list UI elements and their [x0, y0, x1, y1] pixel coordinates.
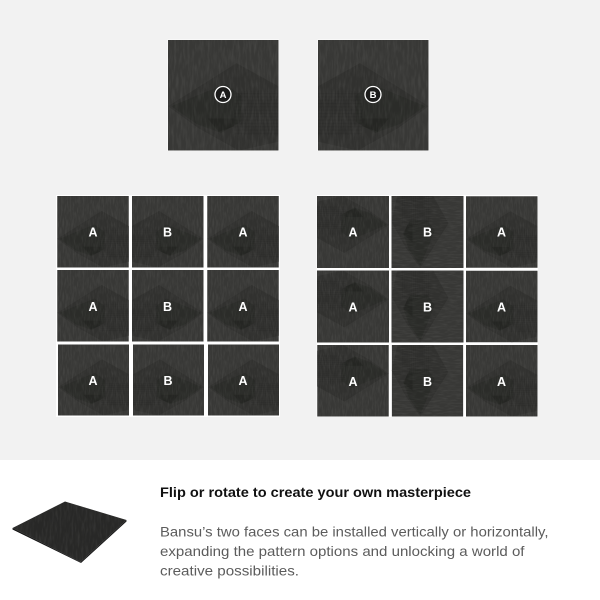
- text block: description: Bansu’s two faces can be installed vertically or horizontally,: [160, 524, 548, 540]
- tile A row 3 column 3: A: [238, 374, 248, 388]
- tile A row 2 column 3: A: [238, 300, 248, 314]
- tile A row 1 column 1: A: [88, 226, 98, 240]
- tile B row 3 column 2: [133, 344, 204, 416]
- tile B rotated row 2 column 2: B: [423, 300, 432, 314]
- heading: Flip or rotate to create your own masterpiece: [160, 485, 471, 500]
- tile face B: [318, 40, 429, 151]
- tile A rotated row 3 column 1: [317, 345, 389, 416]
- tile A row 2 column 3: [466, 271, 538, 342]
- tile B rotated row 1 column 2: [392, 196, 464, 268]
- tile A rotated row 2 column 1: A: [348, 300, 358, 314]
- tile A rotated row 1 column 1: A: [348, 226, 358, 240]
- tile B rotated row 3 column 2: [392, 345, 463, 416]
- tile A row 1 column 1: [57, 196, 129, 268]
- panel: single tiles A and B: [168, 40, 429, 151]
- text block: description: creative possibilities.: [160, 562, 299, 578]
- tile A row 2 column 3: A: [497, 300, 506, 314]
- tile A row 3 column 1: A: [88, 374, 98, 388]
- tile B rotated row 1 column 2: B: [423, 226, 432, 240]
- panel: left 3x3 layout, mirrored faces: [56, 195, 280, 417]
- tile A rotated row 1 column 1: [317, 196, 389, 268]
- icon: tile in perspective: [12, 500, 127, 564]
- background: upper grey panel: [0, 0, 600, 460]
- tile A rotated row 2 column 1: [317, 270, 389, 342]
- panel: right 3x3 layout, rotated faces: [316, 195, 538, 417]
- tile A row 2 column 3: [207, 270, 279, 342]
- tile face A: A: [220, 90, 227, 101]
- text block: description: expanding the pattern options and unlocking a world of: [160, 543, 525, 559]
- tile B rotated row 2 column 2: [392, 270, 464, 342]
- tile A row 3 column 3: A: [497, 375, 506, 389]
- tile A row 1 column 3: A: [497, 226, 506, 240]
- tile face B: B: [370, 90, 377, 101]
- tile A row 1 column 3: [466, 196, 538, 268]
- tile B row 1 column 2: B: [163, 226, 172, 240]
- tile A row 2 column 1: A: [88, 300, 98, 314]
- tile B row 2 column 2: B: [163, 300, 172, 314]
- tile face A: [168, 40, 279, 151]
- tile B row 3 column 2: B: [163, 374, 173, 388]
- tile A row 1 column 3: A: [238, 226, 248, 240]
- tile B row 2 column 2: [132, 270, 204, 342]
- tile A row 3 column 1: [58, 344, 129, 416]
- tile A row 2 column 1: [57, 270, 129, 342]
- tile A row 3 column 3: [466, 345, 538, 416]
- tile A rotated row 3 column 1: A: [348, 375, 358, 389]
- tile A row 3 column 3: [208, 344, 279, 416]
- tile B rotated row 3 column 2: B: [423, 375, 432, 389]
- tile A row 1 column 3: [207, 196, 279, 268]
- text block: description: [160, 524, 548, 578]
- tile B row 1 column 2: [132, 196, 204, 268]
